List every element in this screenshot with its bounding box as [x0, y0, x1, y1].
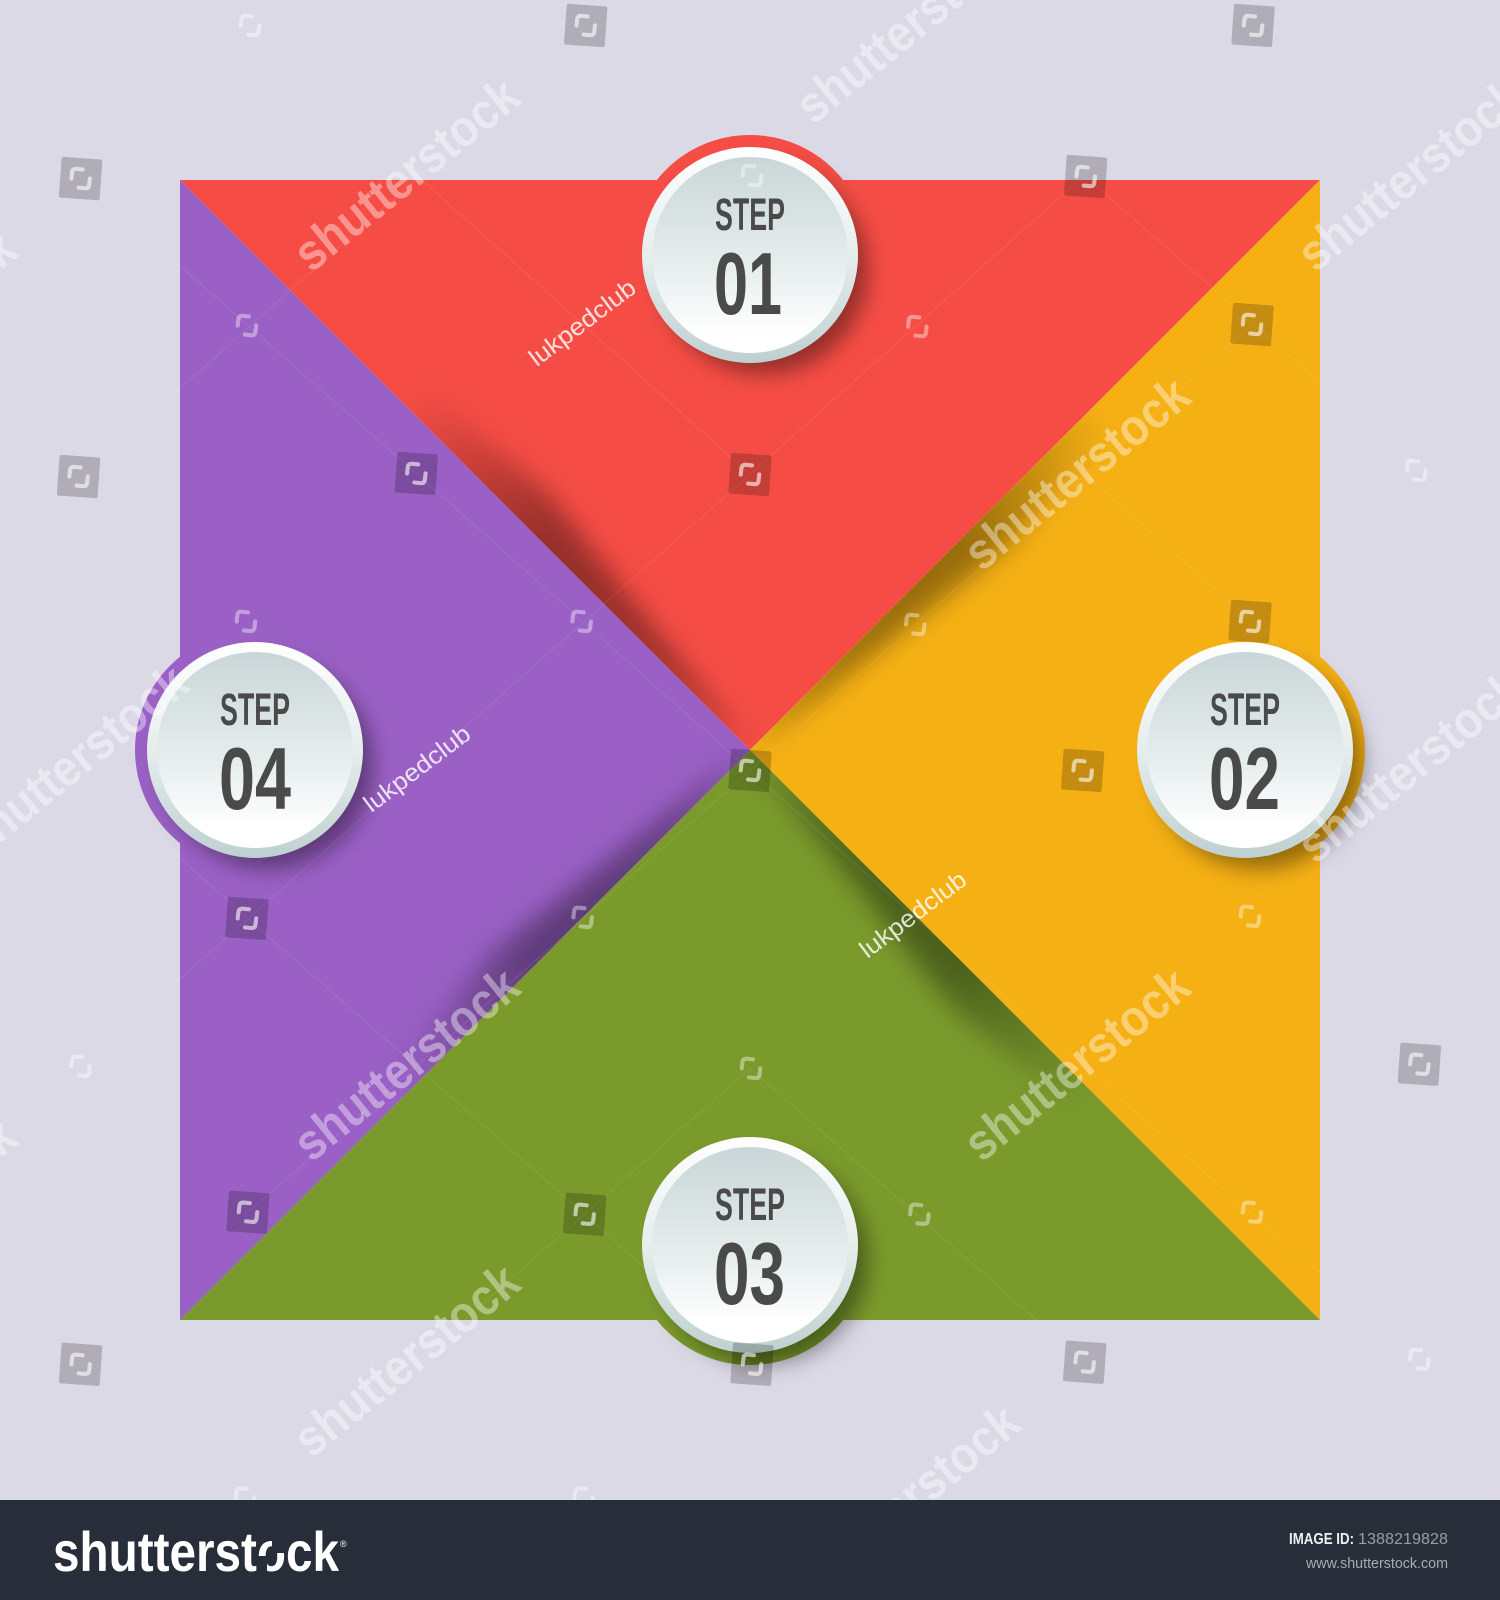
icon: step 03 colored backing disc	[631, 1127, 869, 1365]
step 04 label: STEP	[220, 684, 290, 735]
contributor credits: lukpedclub: lukpedclub	[359, 720, 476, 818]
footer registered mark: ®	[340, 1539, 347, 1549]
contributor credits: lukpedclub: lukpedclub	[524, 274, 641, 372]
footer image id value: 1388219828	[1358, 1531, 1448, 1548]
watermark icons: squared	[57, 4, 1441, 1386]
step 01 badge	[642, 147, 868, 374]
footer logo: shutterstock: shutterstock	[53, 1520, 340, 1583]
step 04 badge	[147, 642, 373, 869]
step 02 number: 02	[1209, 729, 1280, 828]
panel: step 04 purple triangle	[180, 180, 750, 1320]
footer website: www.shutterstock.com	[1305, 1555, 1448, 1572]
step 03 badge	[642, 1137, 868, 1364]
icon: step 02 colored backing disc	[1127, 631, 1365, 869]
watermark text: shutterstock repeats: shutterstock	[282, 1252, 530, 1468]
icon: step 04 colored backing disc	[135, 631, 373, 869]
watermark text: shutterstock repeats: shutterstock	[282, 956, 530, 1172]
watermark text: shutterstock repeats: shutterstock	[953, 956, 1201, 1172]
step 01 label: STEP	[715, 189, 785, 240]
contributor credits: lukpedclub	[359, 274, 972, 964]
footer bar	[0, 1500, 1500, 1600]
step 03 number: 03	[714, 1224, 785, 1323]
step 02 badge	[1137, 642, 1363, 869]
icon: step 01 colored backing disc	[631, 135, 869, 373]
panel: step 01 red triangle	[180, 180, 1320, 750]
watermark text: shutterstock repeats: shutterstock	[953, 365, 1201, 581]
panel: step 02 yellow triangle	[750, 180, 1320, 1320]
step 02 label: STEP	[1210, 684, 1280, 735]
footer image id label: IMAGE ID:	[1289, 1531, 1354, 1548]
step 01 number: 01	[714, 234, 782, 333]
step 04 number: 04	[219, 729, 291, 828]
contributor credits: lukpedclub: lukpedclub	[855, 866, 972, 964]
step 03 label: STEP	[715, 1179, 785, 1230]
watermark text: shutterstock repeats: shutterstock	[282, 66, 530, 282]
panel: step 03 green triangle	[180, 750, 1320, 1320]
